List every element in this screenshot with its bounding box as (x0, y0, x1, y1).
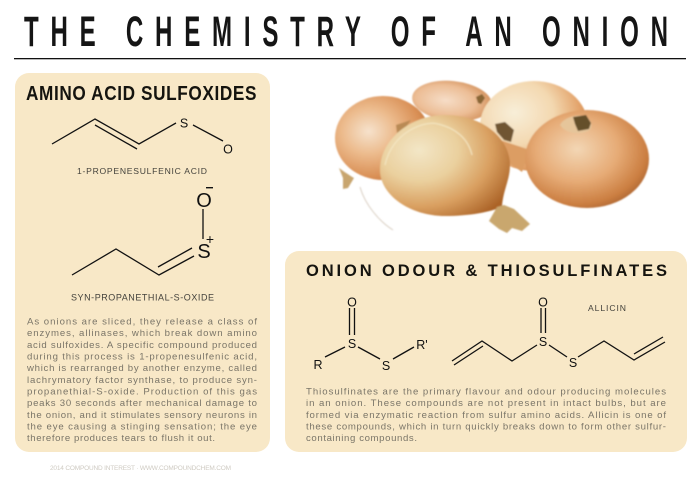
text block: sulfoxides description: which is rearranged by another enzyme, called (26, 363, 257, 374)
molecule: generic thiosulfinate: R' (416, 338, 428, 352)
label: syn-propanethial-s-oxide: SYN-PROPANETHIAL-S-OXIDE (71, 292, 214, 302)
molecule: 1-propenesulfenic acid (52, 116, 233, 156)
text block: sulfoxides description: peaks 30 seconds after mechanical damage to (27, 398, 257, 409)
heading: onion odour and thiosulfinates: ONION ODOUR & THIOSULFINATES (306, 262, 667, 280)
text block: sulfoxides description: As onions are sliced, they release a class of (27, 316, 257, 328)
molecule: generic thiosulfinate: O (347, 296, 357, 310)
molecule: allicin: O (538, 296, 548, 310)
text block: sulfoxides description: the eye causing a stinging sensation; the eye (27, 422, 257, 432)
onion: root tuft (495, 122, 514, 142)
onion: back left (335, 96, 431, 189)
text block: thiosulfinates description (306, 386, 666, 444)
molecule: syn-propanethial-s-oxide (72, 187, 214, 275)
text block: sulfoxides description (26, 316, 257, 444)
onion: loose root (360, 187, 393, 230)
text block: thiosulfinates description: Thiosulfinates are the primary flavour and odour producing molecules (306, 386, 666, 398)
text block: sulfoxides description: enzymes, allinases, which break down amino (27, 328, 257, 339)
text block: sulfoxides description: acid sulfoxides. A specific compound produced (27, 340, 257, 351)
text block: sulfoxides description: propanethial-S-oxide. Production of this gas (27, 386, 257, 398)
molecule: 1-propenesulfenic acid: S (180, 116, 188, 130)
molecule: generic thiosulfinate: R (313, 358, 323, 372)
onion: back right (480, 81, 588, 172)
onion: front centre (380, 115, 530, 233)
molecule: allicin (452, 296, 665, 370)
molecule: syn-propanethial-s-oxide: + (206, 231, 214, 247)
label: 1-propenesulfenic acid: 1-PROPENESULFENIC ACID (77, 166, 207, 176)
molecule: generic thiosulfinate: S (382, 359, 390, 373)
text block: thiosulfinates description: formed via enzymatic reaction from sulfur amino acids. Allicin is one of (306, 410, 666, 421)
molecule: syn-propanethial-s-oxide: O (196, 190, 212, 212)
heading: amino acid sulfoxides: AMINO ACID SULFOXIDES (26, 82, 256, 104)
text block: sulfoxides description: lachrymatory factor synthase, to produce syn- (27, 375, 257, 386)
text block: sulfoxides description: the onion, and it stimulates sensory neurons in (27, 410, 257, 421)
panel: onion odour and thiosulfinates (285, 251, 687, 452)
footer credit: 2014 COMPOUND INTEREST · WWW.COMPOUNDCHEM.COM (50, 465, 231, 472)
molecule: 1-propenesulfenic acid: O (223, 142, 233, 156)
text block: sulfoxides description: during this process is 1-propenesulfenic acid, (27, 352, 257, 362)
text block: thiosulfinates description: containing compounds. (306, 433, 417, 444)
illustration: onions (335, 77, 649, 233)
molecule: allicin: S (539, 335, 547, 349)
molecule: generic thiosulfinate: S (348, 337, 356, 351)
molecule: syn-propanethial-s-oxide: S (197, 241, 211, 263)
title: THE CHEMISTRY OF AN ONION (24, 8, 668, 56)
text block: sulfoxides description: therefore produces tears to flush it out. (27, 433, 215, 444)
label: allicin: ALLICIN (588, 303, 626, 313)
onion: front right (525, 110, 649, 208)
panel: amino acid sulfoxides (15, 73, 270, 452)
text block: thiosulfinates description: in an onion. These compounds are not present in intact bulbs, but are (306, 398, 666, 409)
molecule: allicin: S (569, 356, 577, 370)
text block: thiosulfinates description: these compounds, which in turn quickly breaks down to form other sulfur- (306, 422, 666, 432)
onion: back top (410, 77, 494, 125)
molecule: generic thiosulfinate (313, 296, 428, 373)
